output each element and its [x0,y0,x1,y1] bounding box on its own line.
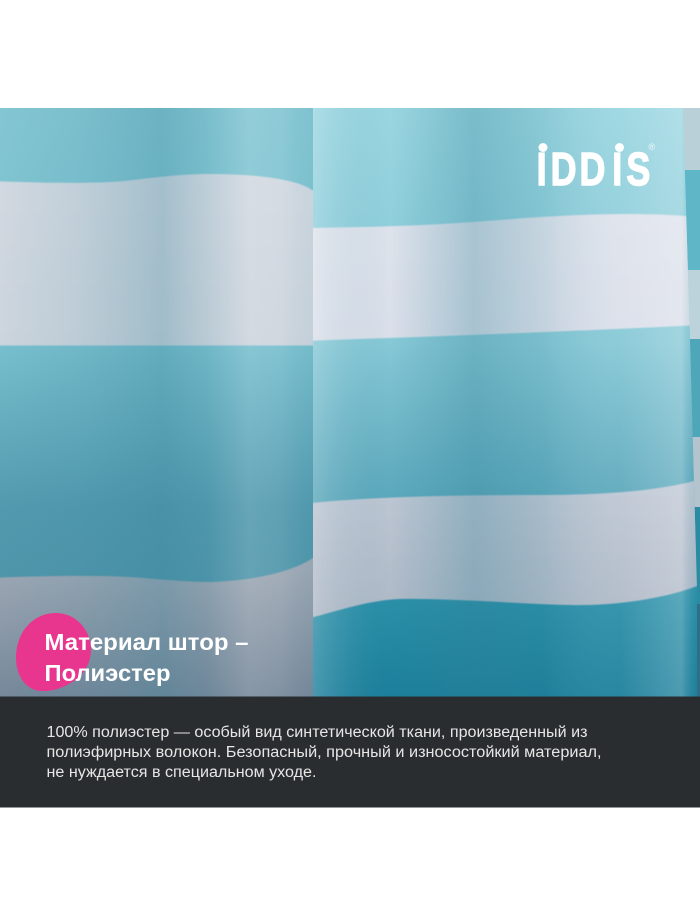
text block: description: 100% полиэстер — особый вид синтетической ткани, произведенный из [46,724,588,741]
text block: description: не нуждается в специальном уходе. [46,764,316,781]
text block: description [46,724,602,781]
panel: right curtain fold [303,108,700,697]
text block: description: полиэфирных волокон. Безопасный, прочный и износостойкий материал, [46,744,602,761]
panel: dark description band [0,696,700,808]
heading [44,629,248,686]
logo: dot of second i [615,143,624,152]
logo: registered mark: ® [648,142,656,152]
heading: Материал штор – [44,629,248,655]
logo: IDDIS: IDDIS [537,144,650,195]
heading: Полиэстер [44,660,170,686]
logo: dot of first i [538,143,548,152]
panel: far-right curtain strip [683,108,700,696]
icon: pink blob behind heading [16,613,91,691]
infographic canvas [0,108,700,808]
panel: left curtain fold [0,108,322,710]
